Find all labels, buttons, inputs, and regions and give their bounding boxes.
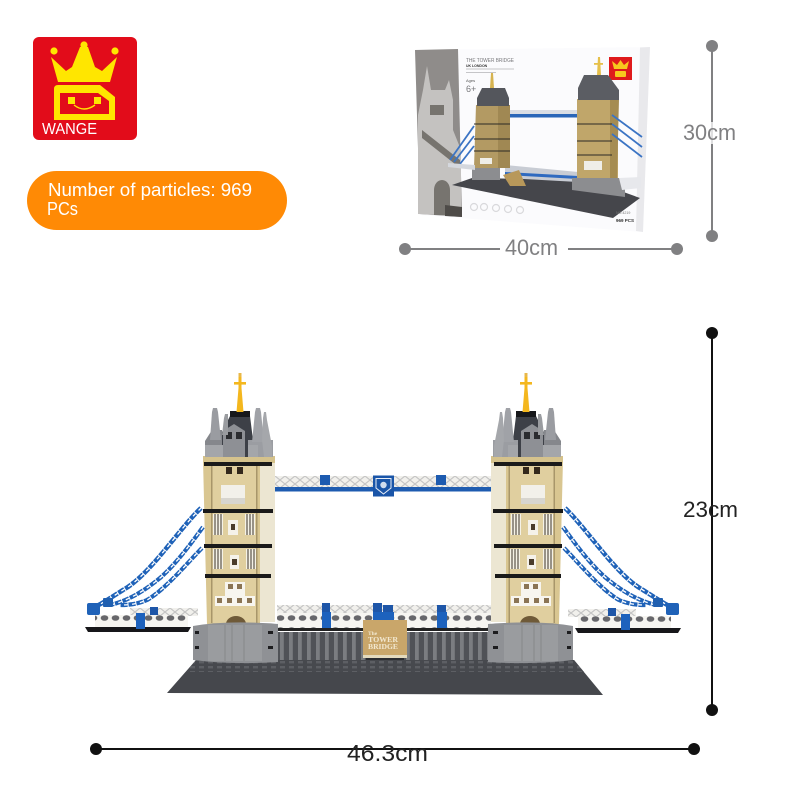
dimension: box width 40cm: 40cm [505, 235, 558, 260]
bridge model [85, 373, 681, 695]
box title [466, 58, 515, 94]
box title: 6+ [466, 84, 476, 94]
sign plaque: TOWER [368, 636, 399, 644]
brand logo [33, 37, 137, 140]
left suspension chains [87, 508, 203, 615]
left tower [193, 373, 278, 663]
sign plaque: The [368, 631, 378, 637]
box model: suspension chains [450, 115, 642, 164]
box model: back bridge [494, 110, 580, 182]
icon: smiling face block [54, 85, 115, 120]
box piece count: NO.4219 [616, 211, 630, 215]
box piece count [616, 211, 634, 223]
right suspension chains [563, 508, 679, 615]
box model: base plate [452, 178, 640, 218]
dimension: box height 30cm: 30cm [683, 120, 736, 145]
base plate [167, 632, 603, 695]
dimension: box width 40cm [399, 235, 683, 260]
lower walkway [277, 603, 491, 631]
upper walkway [267, 475, 499, 496]
left side span [85, 607, 198, 632]
right side span [568, 608, 681, 633]
brand name: WANGE [42, 121, 97, 138]
badge: number of particles: Number of particles: 969 [48, 180, 252, 200]
box model: left tower [472, 73, 510, 180]
dimension: model height 23cm: 23cm [683, 497, 738, 522]
dimension: model width 46.3cm: 46.3cm [347, 740, 428, 766]
box model: sign [503, 170, 526, 186]
box side photo panel [415, 49, 462, 217]
dimension: model width 46.3cm [90, 740, 700, 766]
box title: UK LONDON [466, 64, 488, 68]
box model: side span [448, 163, 641, 190]
box model: right tower [572, 57, 625, 197]
sign plaque: BRIDGE [368, 643, 398, 651]
badge: number of particles: PCs [47, 199, 78, 219]
badge: number of particles [27, 171, 287, 230]
box title: Ages [466, 78, 475, 83]
icon: crest emblem [373, 476, 394, 496]
box logo [609, 57, 632, 80]
box piece count: 969 PCS [616, 218, 634, 223]
right tower [488, 373, 573, 663]
icon: crown [50, 41, 119, 82]
dimension: box height 30cm [683, 40, 736, 242]
sign plaque [363, 620, 407, 660]
product box [415, 47, 650, 232]
box icons [470, 204, 524, 214]
box title: THE TOWER BRIDGE [466, 58, 515, 64]
dimension: model height 23cm [683, 327, 738, 716]
